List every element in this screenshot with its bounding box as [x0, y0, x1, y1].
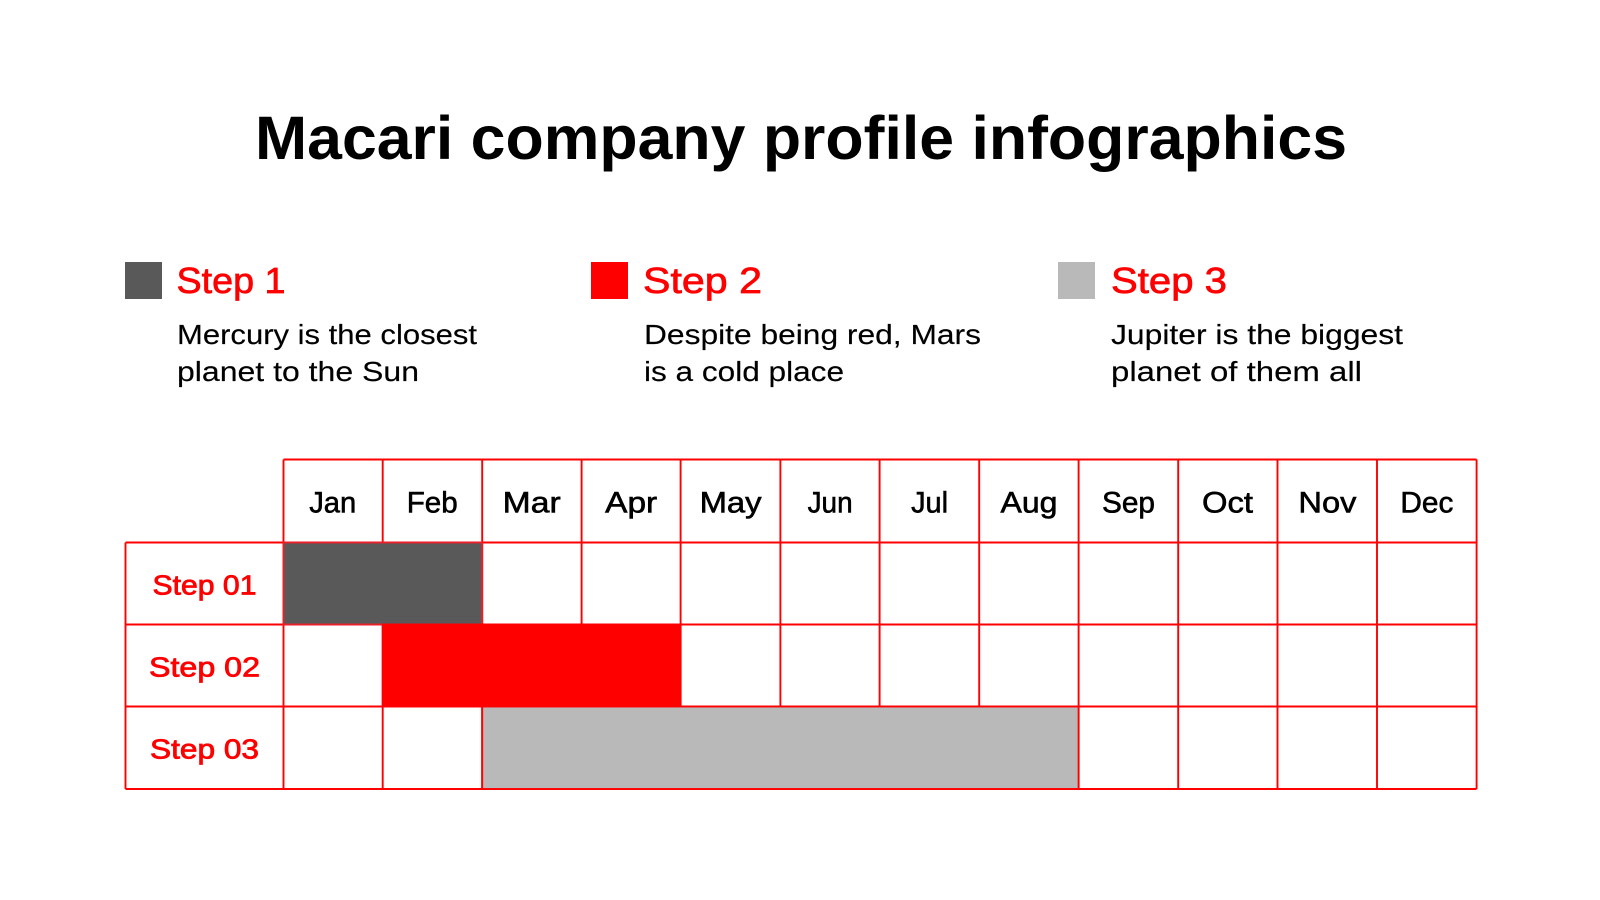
month headers: Aug	[1000, 486, 1058, 520]
text block: step 2 description	[644, 319, 981, 387]
text block: step 3 description	[1111, 319, 1403, 387]
month headers: Nov	[1298, 486, 1356, 520]
heading: step 3: Step 3	[1111, 260, 1227, 301]
legend: step 2	[591, 260, 981, 387]
legend: step 3	[1058, 260, 1403, 387]
icon: light grey swatch	[1058, 262, 1095, 299]
heading: step 2: Step 2	[643, 260, 762, 301]
text block: step 3 description: planet of them all	[1111, 356, 1362, 387]
month headers: May	[700, 486, 762, 520]
text block: step 2 description: is a cold place	[644, 356, 844, 387]
row labels: Step 03	[150, 734, 259, 764]
month headers: Oct	[1202, 486, 1254, 520]
month headers: Feb	[407, 486, 458, 520]
text block: step 1 description: Mercury is the closest	[177, 319, 477, 350]
icon: dark grey swatch	[125, 262, 162, 299]
month headers	[309, 486, 1453, 520]
icon: red swatch	[591, 262, 628, 299]
row labels	[149, 570, 260, 764]
month headers: Apr	[605, 486, 657, 520]
chart grid	[126, 460, 1477, 789]
row labels: Step 02	[149, 652, 260, 682]
month headers: Jan	[309, 486, 356, 520]
bar: step 01 Jan to Feb	[284, 542, 482, 624]
month headers: Dec	[1400, 486, 1453, 520]
heading: step 1: Step 1	[176, 260, 286, 301]
text block: step 2 description: Despite being red, Mars	[644, 319, 981, 350]
row labels: Step 01	[152, 570, 256, 600]
bar: step 03 Mar to Aug	[482, 706, 1079, 789]
gantt chart	[126, 460, 1477, 789]
text block: step 1 description	[177, 319, 477, 387]
title: Macari company profile infographics	[255, 104, 1347, 172]
month headers: Sep	[1102, 486, 1155, 520]
bar: step 02 Feb to Apr	[383, 624, 681, 706]
month headers: Mar	[503, 486, 561, 520]
text block: step 1 description: planet to the Sun	[177, 356, 419, 387]
legend: step 1	[125, 260, 477, 387]
text block: step 3 description: Jupiter is the biggest	[1111, 319, 1403, 350]
month headers: Jul	[911, 486, 948, 520]
month headers: Jun	[808, 486, 853, 520]
